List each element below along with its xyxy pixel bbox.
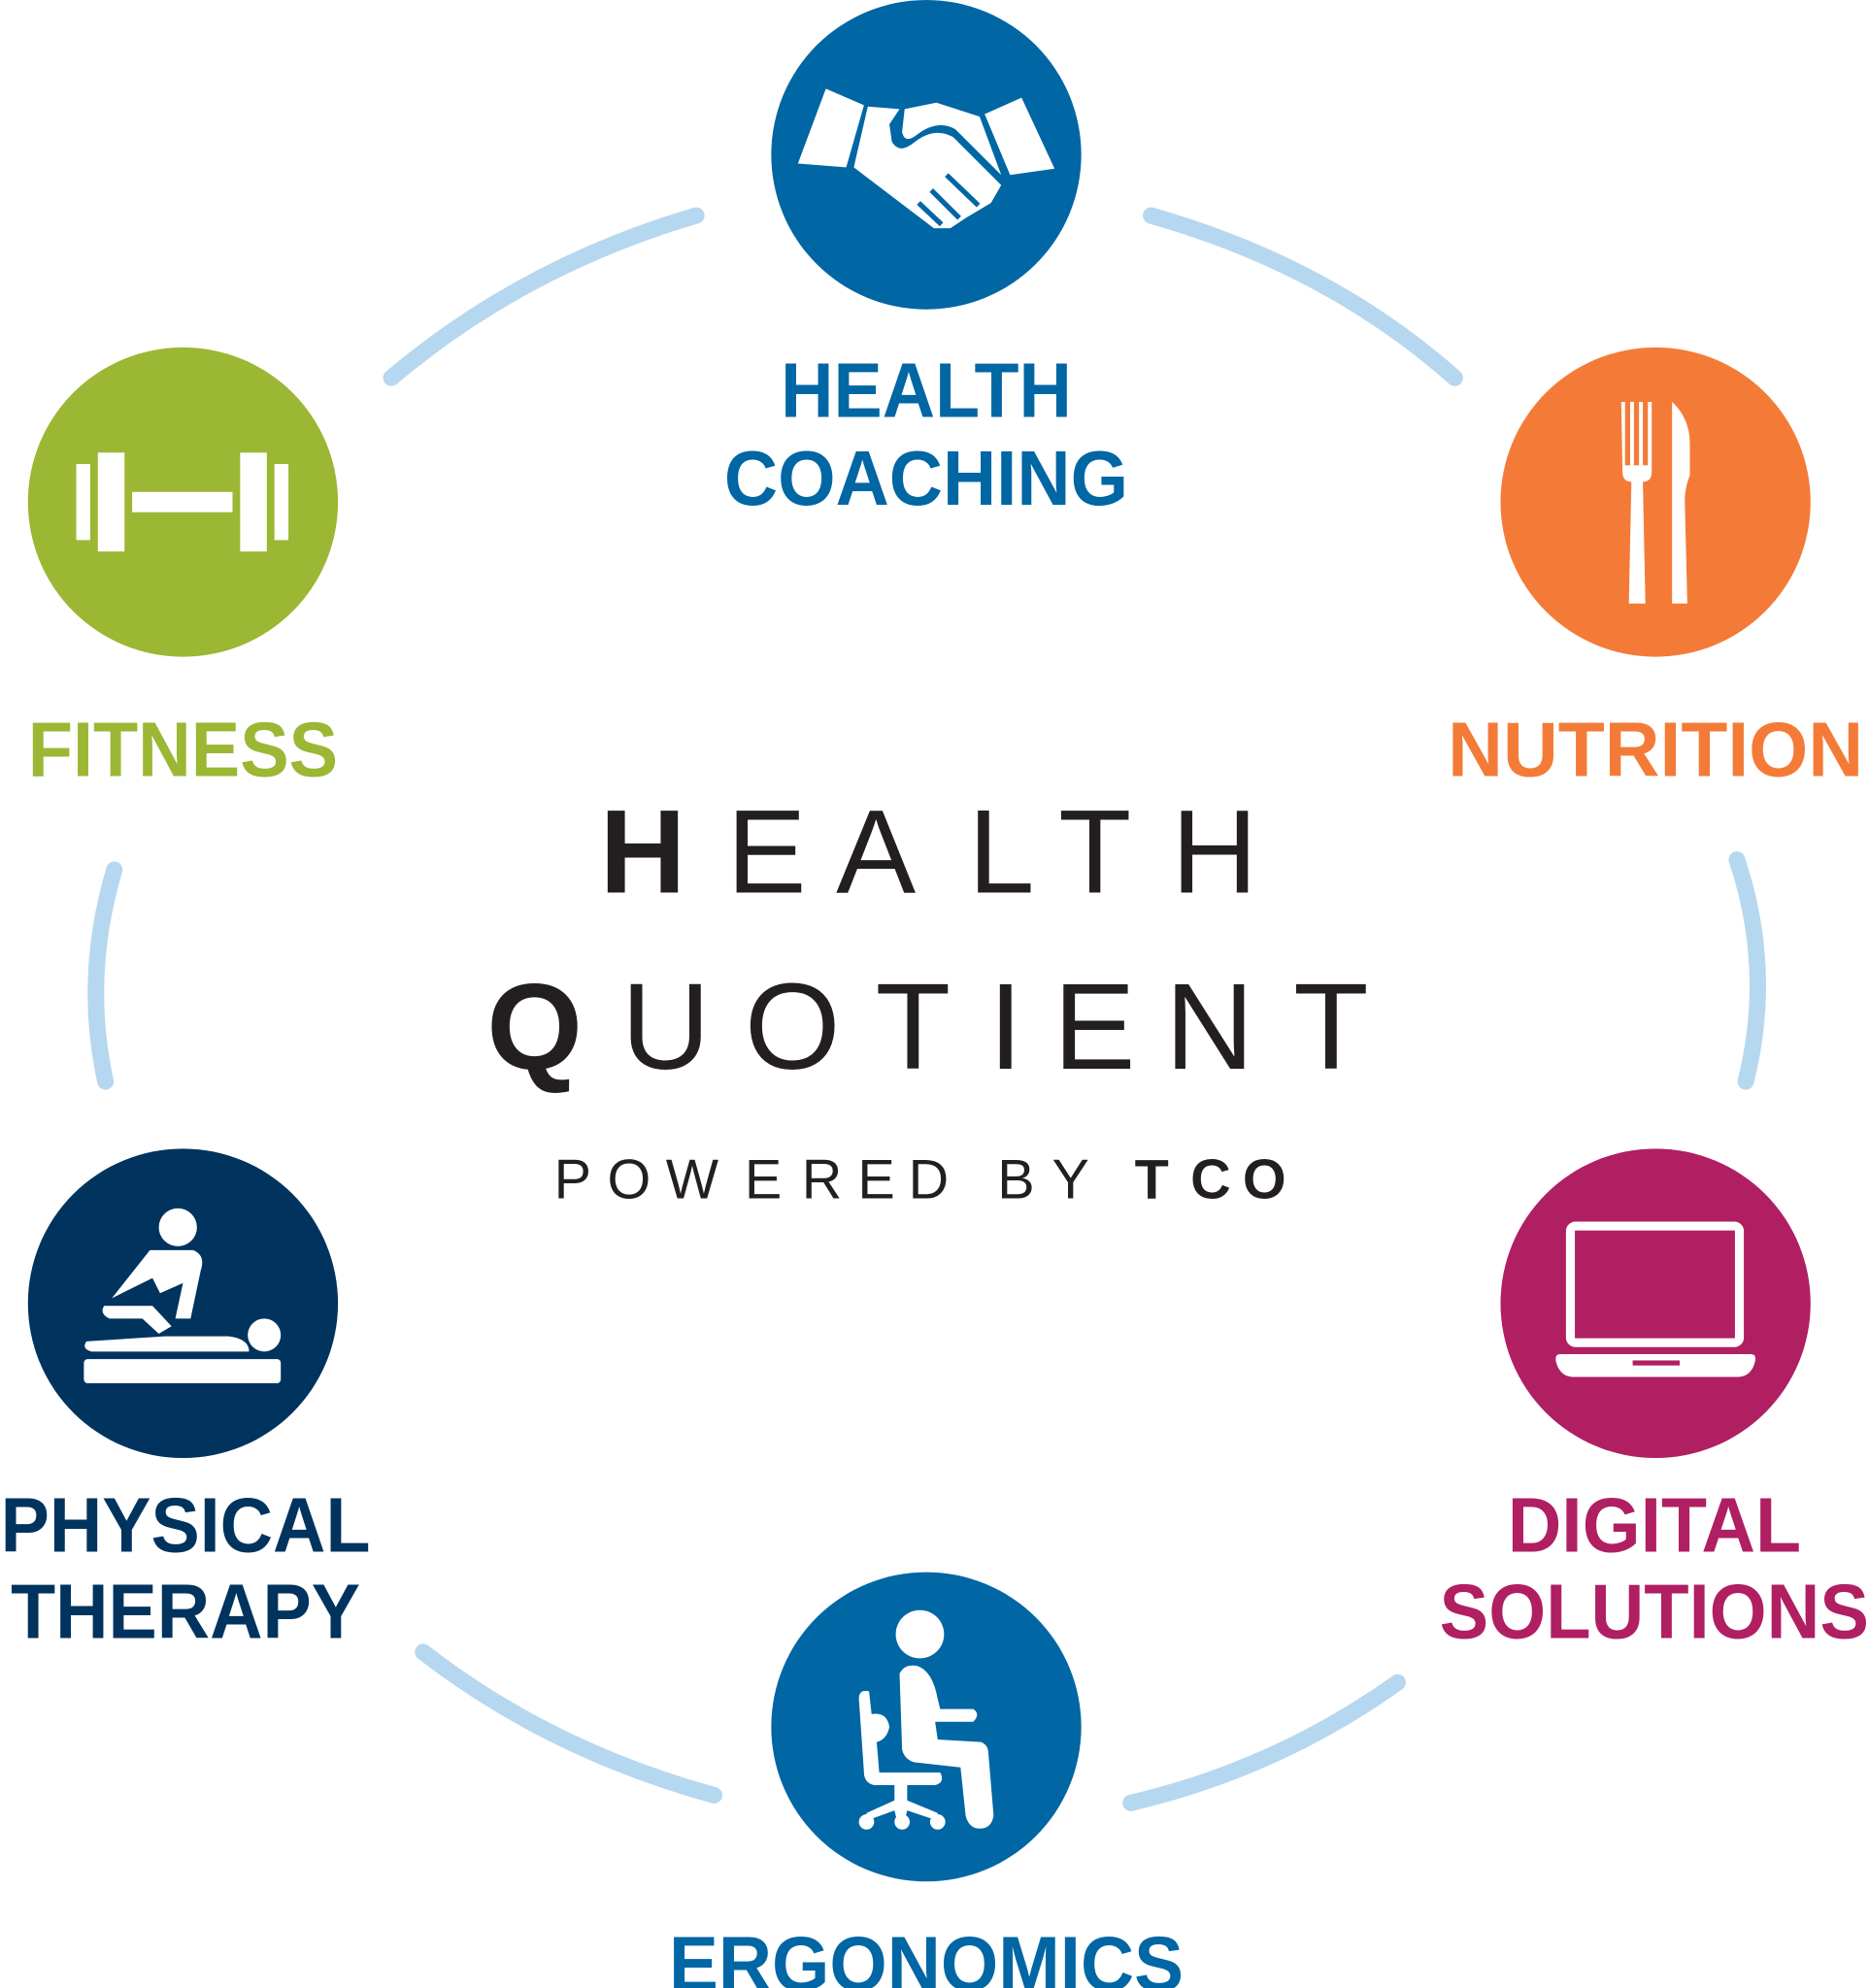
label: physical therapy: THERAPY [11, 1569, 360, 1654]
center title: health quotient: T [1058, 786, 1131, 918]
center title: health quotient: E [1053, 957, 1136, 1095]
health coaching circle [771, 0, 1082, 310]
ergonomics circle [771, 1573, 1082, 1881]
icon: person at chair [859, 1610, 993, 1830]
fitness circle [28, 348, 338, 657]
center title: health quotient: O [745, 957, 841, 1095]
label: health coaching: HEALTH [781, 348, 1072, 434]
center title: health quotient [486, 786, 1369, 1210]
icon: handshake [798, 88, 1054, 228]
subtitle: powered by tco: E [745, 1148, 782, 1210]
center title: health quotient: Q [486, 957, 583, 1095]
center title: health quotient: L [968, 786, 1035, 918]
label: digital solutions: DIGITAL [1508, 1482, 1801, 1569]
center title: health quotient: E [727, 786, 807, 918]
icon: physical therapy [83, 1209, 281, 1383]
subtitle: powered by tco: O [608, 1148, 651, 1210]
subtitle: powered by tco: R [802, 1148, 842, 1210]
icon: laptop [1555, 1226, 1755, 1376]
subtitle: powered by tco: W [666, 1148, 719, 1210]
label: health coaching: COACHING [724, 435, 1128, 521]
icon: fork and knife [1621, 402, 1689, 604]
center title: health quotient: N [1165, 957, 1254, 1095]
label: physical therapy: PHYSICAL [1, 1482, 370, 1569]
center title: health quotient: U [621, 957, 711, 1095]
center title: health quotient: H [1172, 786, 1257, 918]
subtitle: powered by tco: T [1135, 1148, 1169, 1210]
center title: health quotient: A [836, 786, 916, 918]
center title: health quotient: T [1293, 957, 1369, 1095]
label: fitness: FITNESS [28, 706, 338, 792]
center title: health quotient: H [600, 786, 686, 918]
icon: dumbbell [77, 452, 288, 551]
label: physical therapy [1, 1482, 370, 1654]
nutrition circle [1500, 348, 1811, 657]
center title: health quotient: T [876, 957, 951, 1095]
label: health coaching [724, 348, 1128, 521]
label: digital solutions [1440, 1482, 1869, 1654]
subtitle: powered by tco: P [554, 1148, 591, 1210]
subtitle: powered by tco: O [1243, 1148, 1286, 1210]
center title: health quotient: I [988, 957, 1022, 1095]
physical therapy circle [28, 1148, 338, 1458]
digital solutions circle [1500, 1148, 1811, 1458]
subtitle: powered by tco: Y [1052, 1148, 1089, 1210]
subtitle: powered by tco: D [909, 1148, 949, 1210]
label: nutrition: NUTRITION [1448, 706, 1863, 792]
subtitle: powered by tco: B [997, 1148, 1035, 1210]
subtitle: powered by tco: C [1190, 1148, 1231, 1210]
subtitle: powered by tco: E [857, 1148, 895, 1210]
